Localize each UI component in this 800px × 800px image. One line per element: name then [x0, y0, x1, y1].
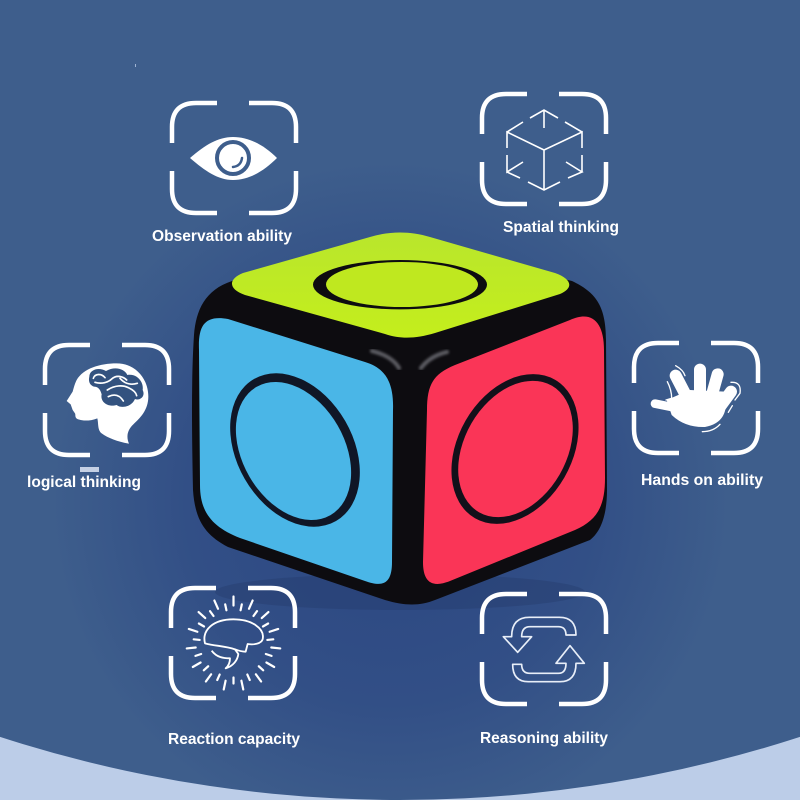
- label: Spatial thinking: [503, 219, 619, 236]
- icon: hand: [655, 366, 740, 432]
- icon frame: [482, 94, 606, 204]
- icon frame: [482, 594, 606, 704]
- cube shadow: [215, 574, 585, 610]
- hands on ability item: [634, 343, 763, 489]
- right red face: [423, 317, 605, 584]
- observation ability item: [152, 103, 296, 245]
- left blue face: [199, 318, 393, 584]
- icon: eye: [190, 137, 277, 180]
- top yellow face: [232, 232, 569, 338]
- label: Hands on ability: [641, 472, 763, 489]
- icon frame: [634, 343, 758, 453]
- label: Observation ability: [152, 228, 292, 245]
- reasoning ability item: [480, 594, 608, 747]
- label: logical thinking: [27, 474, 141, 491]
- logical thinking item: [27, 345, 169, 491]
- icon frame: [45, 345, 169, 455]
- reaction capacity item: [168, 588, 300, 748]
- icon frame: [171, 588, 295, 698]
- label: Reaction capacity: [168, 731, 300, 748]
- icon: head with brain: [67, 363, 148, 444]
- cube: [192, 232, 607, 610]
- corner gloss: [372, 351, 447, 368]
- label: Reasoning ability: [480, 730, 608, 747]
- icon: cube: [507, 110, 582, 190]
- small bar: [80, 467, 99, 472]
- spatial thinking item: [482, 94, 619, 236]
- icon: cycle arrows: [503, 617, 584, 682]
- icon frame: [172, 103, 296, 213]
- cube body: [192, 240, 607, 604]
- icon: brain with rays: [187, 596, 280, 689]
